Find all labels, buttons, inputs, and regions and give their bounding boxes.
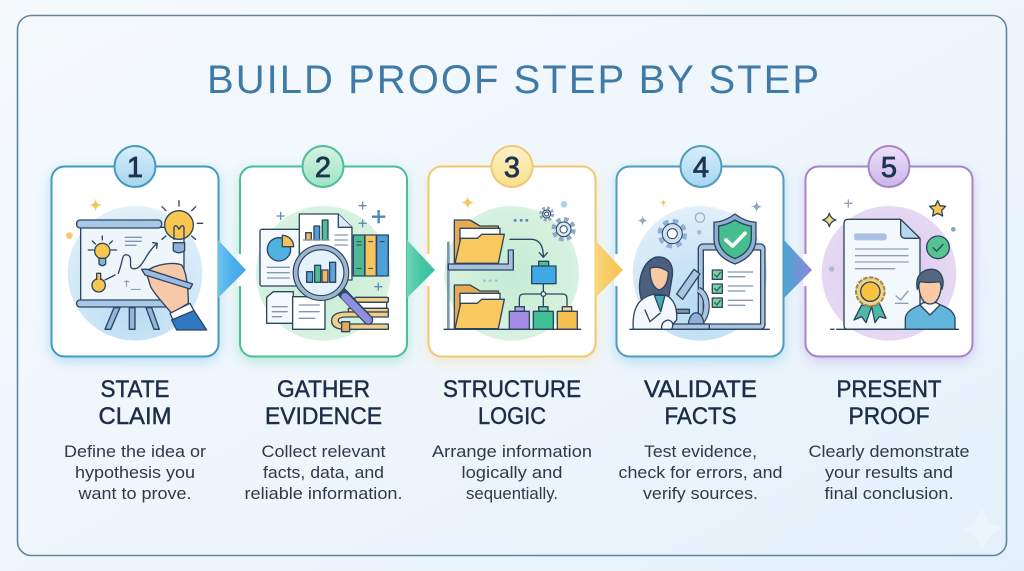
panel: step 2 card [240,166,407,356]
text: step 1 heading [98,376,172,430]
panel: step 5 card [806,166,972,356]
text: step 5 description: Clearly demonstrate [808,443,970,461]
text: step 4 heading: VALIDATE [644,376,757,403]
badge: number 1 [114,146,156,187]
text: step 1 description: want to prove. [77,485,192,503]
arrow: step 3 to 4 [595,240,623,298]
icon: corner sparkle [964,511,1000,547]
icon: scientist with microscope and shield [630,198,769,341]
icon: folders and hierarchy [444,195,581,341]
text: step 4 description: verify sources. [643,485,758,503]
text: step 3 description: Arrange information [432,443,592,461]
badge: number 5: 5 [881,152,897,184]
text: step 1 heading: STATE [100,376,170,403]
arrow: step 4 to 5 [784,240,812,298]
text: step 2 heading: GATHER [277,376,370,403]
text: step 2 description: facts, data, and [263,464,384,482]
text: step 2 heading [265,376,382,430]
text: step 1 heading: CLAIM [98,403,172,430]
text: step 2 heading: EVIDENCE [265,403,382,430]
panel: step 4 card [616,166,784,356]
icon: certificate with person [822,199,958,341]
text: step 3 heading [443,376,581,430]
text: step 4 heading: FACTS [664,403,736,430]
text: step 5 description: your results and [825,464,953,482]
title: BUILD PROOF STEP BY STEP [207,58,819,102]
text: step 1 description: hypothesis you [75,464,195,482]
text: step 5 heading: PROOF [848,403,930,430]
text: step 5 description: final conclusion. [824,485,954,503]
text: step 3 description [432,443,592,503]
badge: number 5 [868,146,910,187]
text: step 5 heading [836,376,942,430]
arrow: step 2 to 3 [407,240,435,298]
text: step 1 description: Define the idea or [64,443,207,461]
text: step 4 description [618,443,782,503]
text: step 3 heading: LOGIC [478,403,546,430]
text: step 2 description: reliable information. [244,485,402,503]
badge: number 1: 1 [127,152,143,184]
text: step 3 description: logically and [462,464,562,482]
icon: presentation board with hand [66,197,207,341]
text: step 4 heading [644,376,757,430]
badge: number 4: 4 [693,152,709,184]
icon: documents, books and magnifier [256,202,391,341]
badge: number 4 [680,146,722,187]
badge: number 3 [492,146,532,187]
badge: number 2: 2 [315,152,331,184]
text: step 2 description: Collect relevant [262,443,386,461]
text: step 4 description: check for errors, and [618,464,782,482]
badge: number 2 [302,146,344,187]
text: step 2 description [244,443,402,503]
text: step 5 description [808,443,970,503]
text: step 3 description: sequentially. [466,485,558,503]
text: step 1 description [64,443,207,503]
text: step 4 description: Test evidence, [644,443,757,461]
panel: step 3 card [428,166,596,356]
badge: number 3: 3 [504,152,520,184]
text: step 5 heading: PRESENT [836,376,942,403]
text: step 3 heading: STRUCTURE [443,376,581,403]
arrow: step 1 to 2 [218,240,246,298]
panel: step 1 card [52,166,218,356]
